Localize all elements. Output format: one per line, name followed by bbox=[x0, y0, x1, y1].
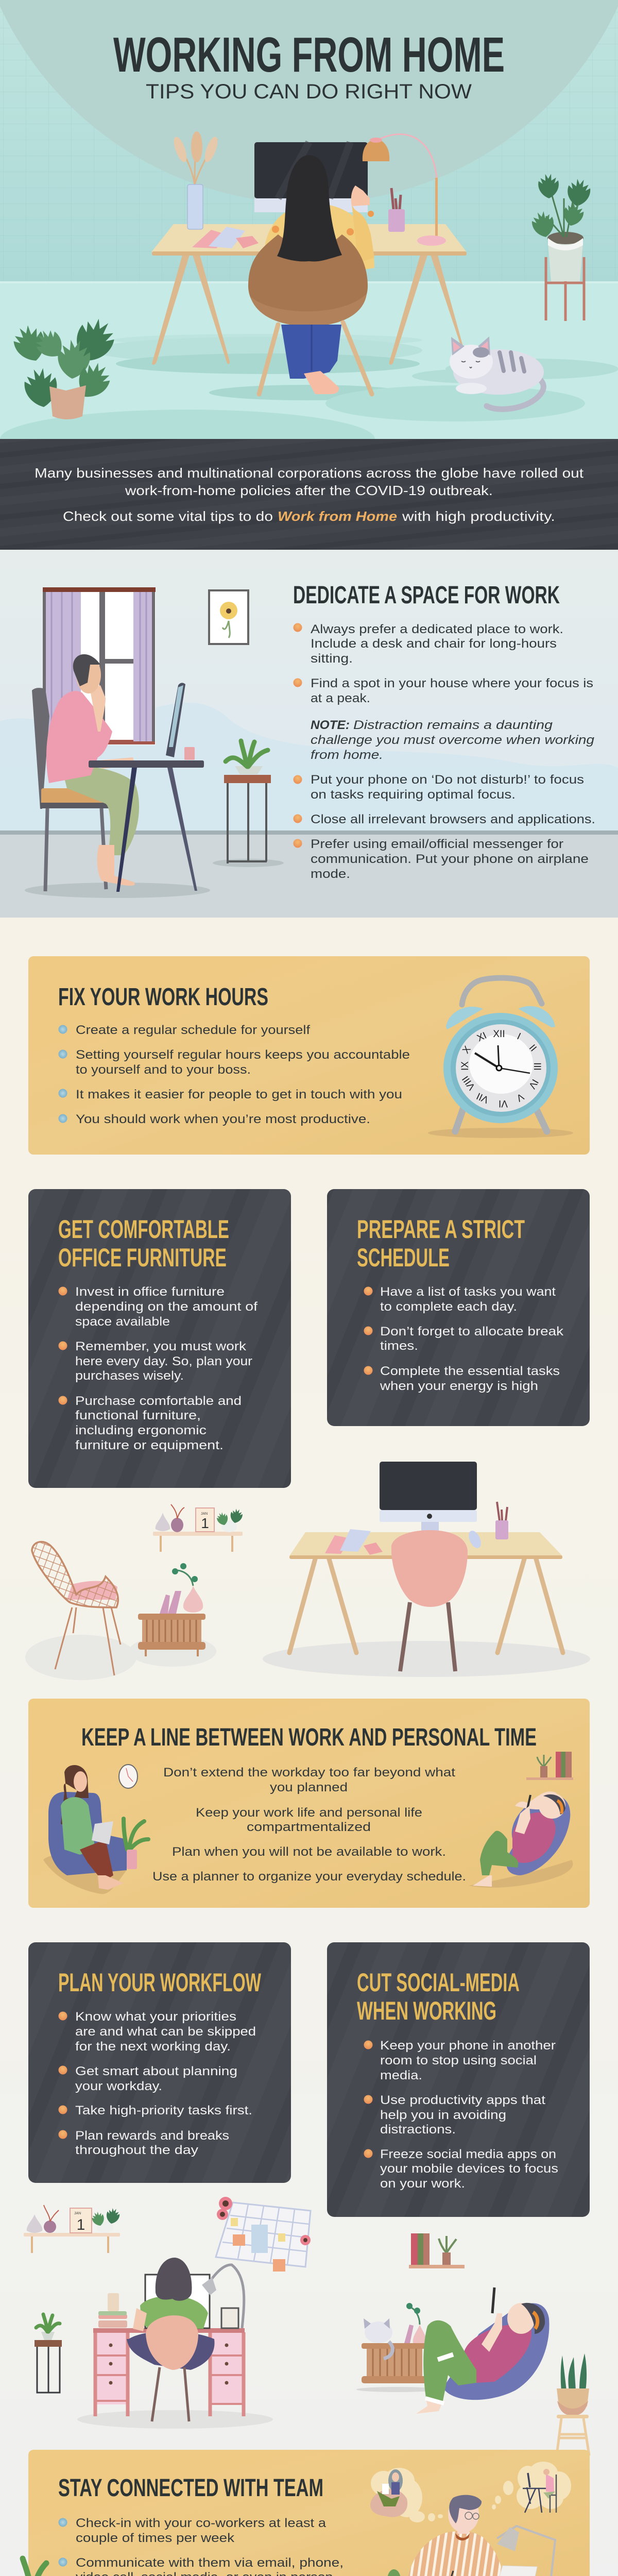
bullet list: Keep your phone in another bbox=[380, 2039, 556, 2053]
heading bbox=[357, 1968, 520, 2025]
bullet list: help you in avoiding bbox=[380, 2108, 506, 2122]
panel: plan your workflow bbox=[28, 1942, 291, 2183]
panel: intro band bbox=[0, 439, 618, 550]
bullet list: on your work. bbox=[380, 2177, 465, 2191]
illustration: plant on stool bbox=[557, 2353, 589, 2455]
bullet list: space available bbox=[75, 1315, 170, 1329]
text block: Don’t extend the workday too far beyond what bbox=[163, 1766, 455, 1780]
illustration: man at desk bbox=[25, 654, 210, 898]
heading: SCHEDULE bbox=[357, 1243, 450, 1272]
bullet list bbox=[59, 2516, 344, 2576]
bullet list: Prefer using email/official messenger for bbox=[311, 837, 563, 851]
bullet list: Purchase comfortable and bbox=[75, 1394, 242, 1408]
bullet list: including ergonomic bbox=[75, 1423, 207, 1437]
text block: compartmentalized bbox=[247, 1820, 371, 1834]
illustration: woman at pink desk bbox=[77, 2258, 273, 2429]
illustration: thought bubble right bbox=[492, 2462, 571, 2513]
bullet list: your workday. bbox=[75, 2079, 162, 2093]
illustration: wall shelf: 1 bbox=[201, 1515, 209, 1531]
panel: dedicate a space bbox=[0, 550, 618, 918]
bullet list: functional furniture, bbox=[75, 1409, 201, 1422]
illustration: memo grid board bbox=[216, 2197, 311, 2272]
heading bbox=[58, 1215, 229, 1272]
bullet list: Communicate with them via email, phone, bbox=[76, 2556, 344, 2570]
bullet list: from home. bbox=[311, 748, 383, 762]
illustration: furniture room bbox=[25, 1462, 590, 1680]
heading bbox=[357, 1215, 525, 1272]
bullet list: here every day. So, plan your bbox=[75, 1354, 252, 1368]
illustration: window and picture bbox=[43, 587, 248, 745]
intro text: Many businesses and multinational corporations across the globe have rolled out bbox=[35, 465, 584, 481]
heading: PREPARE A STRICT bbox=[357, 1215, 525, 1244]
panel: hero bbox=[0, 0, 618, 468]
bullet list: Take high-priority tasks first. bbox=[75, 2104, 252, 2117]
bullet list: distractions. bbox=[380, 2123, 456, 2137]
illustration: plant on stand bbox=[530, 174, 592, 321]
text block: you planned bbox=[270, 1781, 348, 1794]
panel: fix your work hours bbox=[28, 956, 590, 1155]
heading: PLAN YOUR WORKFLOW bbox=[58, 1968, 262, 1997]
heading: WHEN WORKING bbox=[357, 1996, 496, 2025]
illustration: wall shelf: JAN bbox=[201, 1512, 208, 1516]
illustration: planning room bbox=[24, 2197, 589, 2455]
bullet list bbox=[364, 2039, 558, 2191]
bullet list: for the next working day. bbox=[75, 2040, 231, 2054]
heading: OFFICE FURNITURE bbox=[58, 1243, 227, 1272]
bullet list bbox=[294, 622, 595, 881]
bullet list: media. bbox=[380, 2069, 422, 2082]
icon: alarm clock: IV bbox=[526, 1077, 540, 1091]
intro text: work-from-home policies after the COVID-19 outbreak. bbox=[125, 483, 493, 498]
bullet list: You should work when you’re most productive. bbox=[76, 1112, 370, 1126]
intro text: Work from Home bbox=[278, 509, 397, 524]
bullet list bbox=[59, 1023, 410, 1126]
bullet list: room to stop using social bbox=[380, 2054, 537, 2067]
illustration: plant stand bbox=[35, 2314, 62, 2393]
text block bbox=[152, 1766, 466, 1884]
text block: Keep your work life and personal life bbox=[196, 1806, 422, 1820]
bullet list: Don’t forget to allocate break bbox=[380, 1325, 564, 1338]
illustration: desk with monitor and pink chair bbox=[263, 1462, 590, 1677]
bullet list: Check-in with your co-workers at least a bbox=[76, 2516, 327, 2530]
bullet list: mode. bbox=[311, 867, 350, 881]
bullet list: depending on the amount of bbox=[75, 1300, 258, 1314]
text block: Use a planner to organize your everyday schedule. bbox=[152, 1870, 466, 1884]
bullet list: NOTE: bbox=[311, 718, 350, 732]
illustration: man at laptop bbox=[374, 2495, 558, 2576]
intro text: Check out some vital tips to do bbox=[63, 509, 273, 524]
icon: alarm clock bbox=[428, 978, 573, 1138]
illustration: books shelf bbox=[409, 2233, 465, 2268]
icon: alarm clock: I bbox=[515, 1031, 522, 1042]
bullet list: when your energy is high bbox=[380, 1379, 538, 1393]
bullet list: communication. Put your phone on airplane bbox=[311, 852, 589, 866]
intro text: with high productivity. bbox=[402, 509, 555, 524]
illustration: shelf bbox=[24, 2205, 121, 2253]
bullet list: sitting. bbox=[311, 652, 353, 666]
bullet list: to complete each day. bbox=[380, 1300, 517, 1314]
bullet list: Use productivity apps that bbox=[380, 2093, 545, 2107]
bullet list: Create a regular schedule for yourself bbox=[76, 1023, 310, 1037]
heading: FIX YOUR WORK HOURS bbox=[58, 984, 268, 1011]
bullet list: Include a desk and chair for long-hours bbox=[311, 637, 557, 651]
icon: alarm clock: VIII bbox=[460, 1074, 477, 1092]
panel: keep a line between work and personal time bbox=[28, 1699, 590, 1908]
bullet list: Know what your priorities bbox=[75, 2010, 236, 2024]
heading: STAY CONNECTED WITH TEAM bbox=[58, 2475, 323, 2502]
bullet list: Complete the essential tasks bbox=[380, 1364, 560, 1378]
panel: stay connected bbox=[16, 2450, 590, 2576]
illustration: cat bbox=[450, 336, 544, 409]
bullet list: challenge you must overcome when working bbox=[311, 733, 595, 747]
illustration: woman in armchair bbox=[43, 1765, 148, 1894]
icon: alarm clock: IX bbox=[460, 1061, 471, 1071]
illustration: man in bean bag bbox=[469, 1791, 573, 1888]
panel: cut social media bbox=[327, 1942, 590, 2217]
bullet list: Close all irrelevant browsers and applications. bbox=[311, 812, 595, 826]
bullet list: furniture or equipment. bbox=[75, 1438, 224, 1452]
bullet list: times. bbox=[380, 1339, 418, 1353]
illustration: shelf with books bbox=[526, 1752, 573, 1780]
bullet list: Distraction remains a daunting bbox=[353, 718, 553, 732]
icon: alarm clock: X bbox=[460, 1044, 473, 1056]
bullet list: Setting yourself regular hours keeps you accountable bbox=[76, 1048, 410, 1062]
panel: prepare a strict schedule bbox=[327, 1189, 590, 1426]
illustration: thought bubble left bbox=[370, 2468, 443, 2522]
bullet list: at a peak. bbox=[311, 691, 370, 705]
bullet list bbox=[59, 1285, 258, 1452]
bullet list: Invest in office furniture bbox=[75, 1285, 225, 1299]
icon: alarm clock: XI bbox=[475, 1030, 488, 1044]
heading: CUT SOCIAL-MEDIA bbox=[357, 1968, 520, 1997]
bullet list: on tasks requiring optimal focus. bbox=[311, 788, 516, 802]
bullet list: to yourself and to your boss. bbox=[76, 1063, 251, 1077]
illustration: side table plant bbox=[213, 741, 284, 867]
page background bbox=[0, 918, 618, 2576]
bullet list: purchases wisely. bbox=[75, 1369, 184, 1383]
bullet list: are and what can be skipped bbox=[75, 2025, 256, 2039]
illustration: potted plant bbox=[16, 2558, 50, 2576]
icon: alarm clock: III bbox=[531, 1062, 542, 1071]
illustration: wall shelf bbox=[153, 1504, 244, 1552]
icon: alarm clock: V bbox=[514, 1091, 525, 1104]
bullet list: Plan rewards and breaks bbox=[75, 2129, 229, 2143]
bullet list: Have a list of tasks you want bbox=[380, 1285, 556, 1299]
bullet list: Remember, you must work bbox=[75, 1340, 247, 1353]
intro text bbox=[35, 465, 584, 524]
bullet list: Get smart about planning bbox=[75, 2064, 237, 2078]
icon: alarm clock: II bbox=[527, 1043, 539, 1054]
panel: get comfortable office furniture bbox=[28, 1189, 291, 1488]
icon: alarm clock: VI bbox=[499, 1098, 508, 1109]
text block: Plan when you will not be available to work. bbox=[172, 1845, 446, 1859]
illustration: shelf: 1 bbox=[77, 2216, 85, 2233]
bullet list: It makes it easier for people to get in touch with you bbox=[76, 1088, 402, 1101]
icon: alarm clock: VII bbox=[475, 1090, 490, 1105]
subtitle: TIPS YOU CAN DO RIGHT NOW bbox=[146, 80, 472, 103]
bullet list: Always prefer a dedicated place to work. bbox=[311, 622, 563, 636]
bullet list: Freeze social media apps on bbox=[380, 2147, 556, 2161]
illustration: monstera plant bbox=[10, 313, 120, 419]
bullet list: Put your phone on ‘Do not disturb!’ to focus bbox=[311, 773, 584, 787]
bullet list: couple of times per week bbox=[76, 2531, 235, 2545]
heading: GET COMFORTABLE bbox=[58, 1215, 229, 1244]
illustration: woman at desk bbox=[152, 131, 467, 394]
bullet list: throughout the day bbox=[75, 2143, 198, 2157]
icon: alarm clock: XII bbox=[493, 1029, 505, 1040]
illustration: man in bean bag with cabinet bbox=[356, 2287, 549, 2414]
illustration: shelf: JAN bbox=[74, 2212, 81, 2215]
bullet list bbox=[364, 1285, 564, 1393]
bullet list: Find a spot in your house where your focus is bbox=[311, 676, 593, 690]
bullet list bbox=[59, 2010, 256, 2157]
bullet list: your mobile devices to focus bbox=[380, 2162, 558, 2176]
illustration: wicker chair and side table bbox=[25, 1542, 216, 1680]
